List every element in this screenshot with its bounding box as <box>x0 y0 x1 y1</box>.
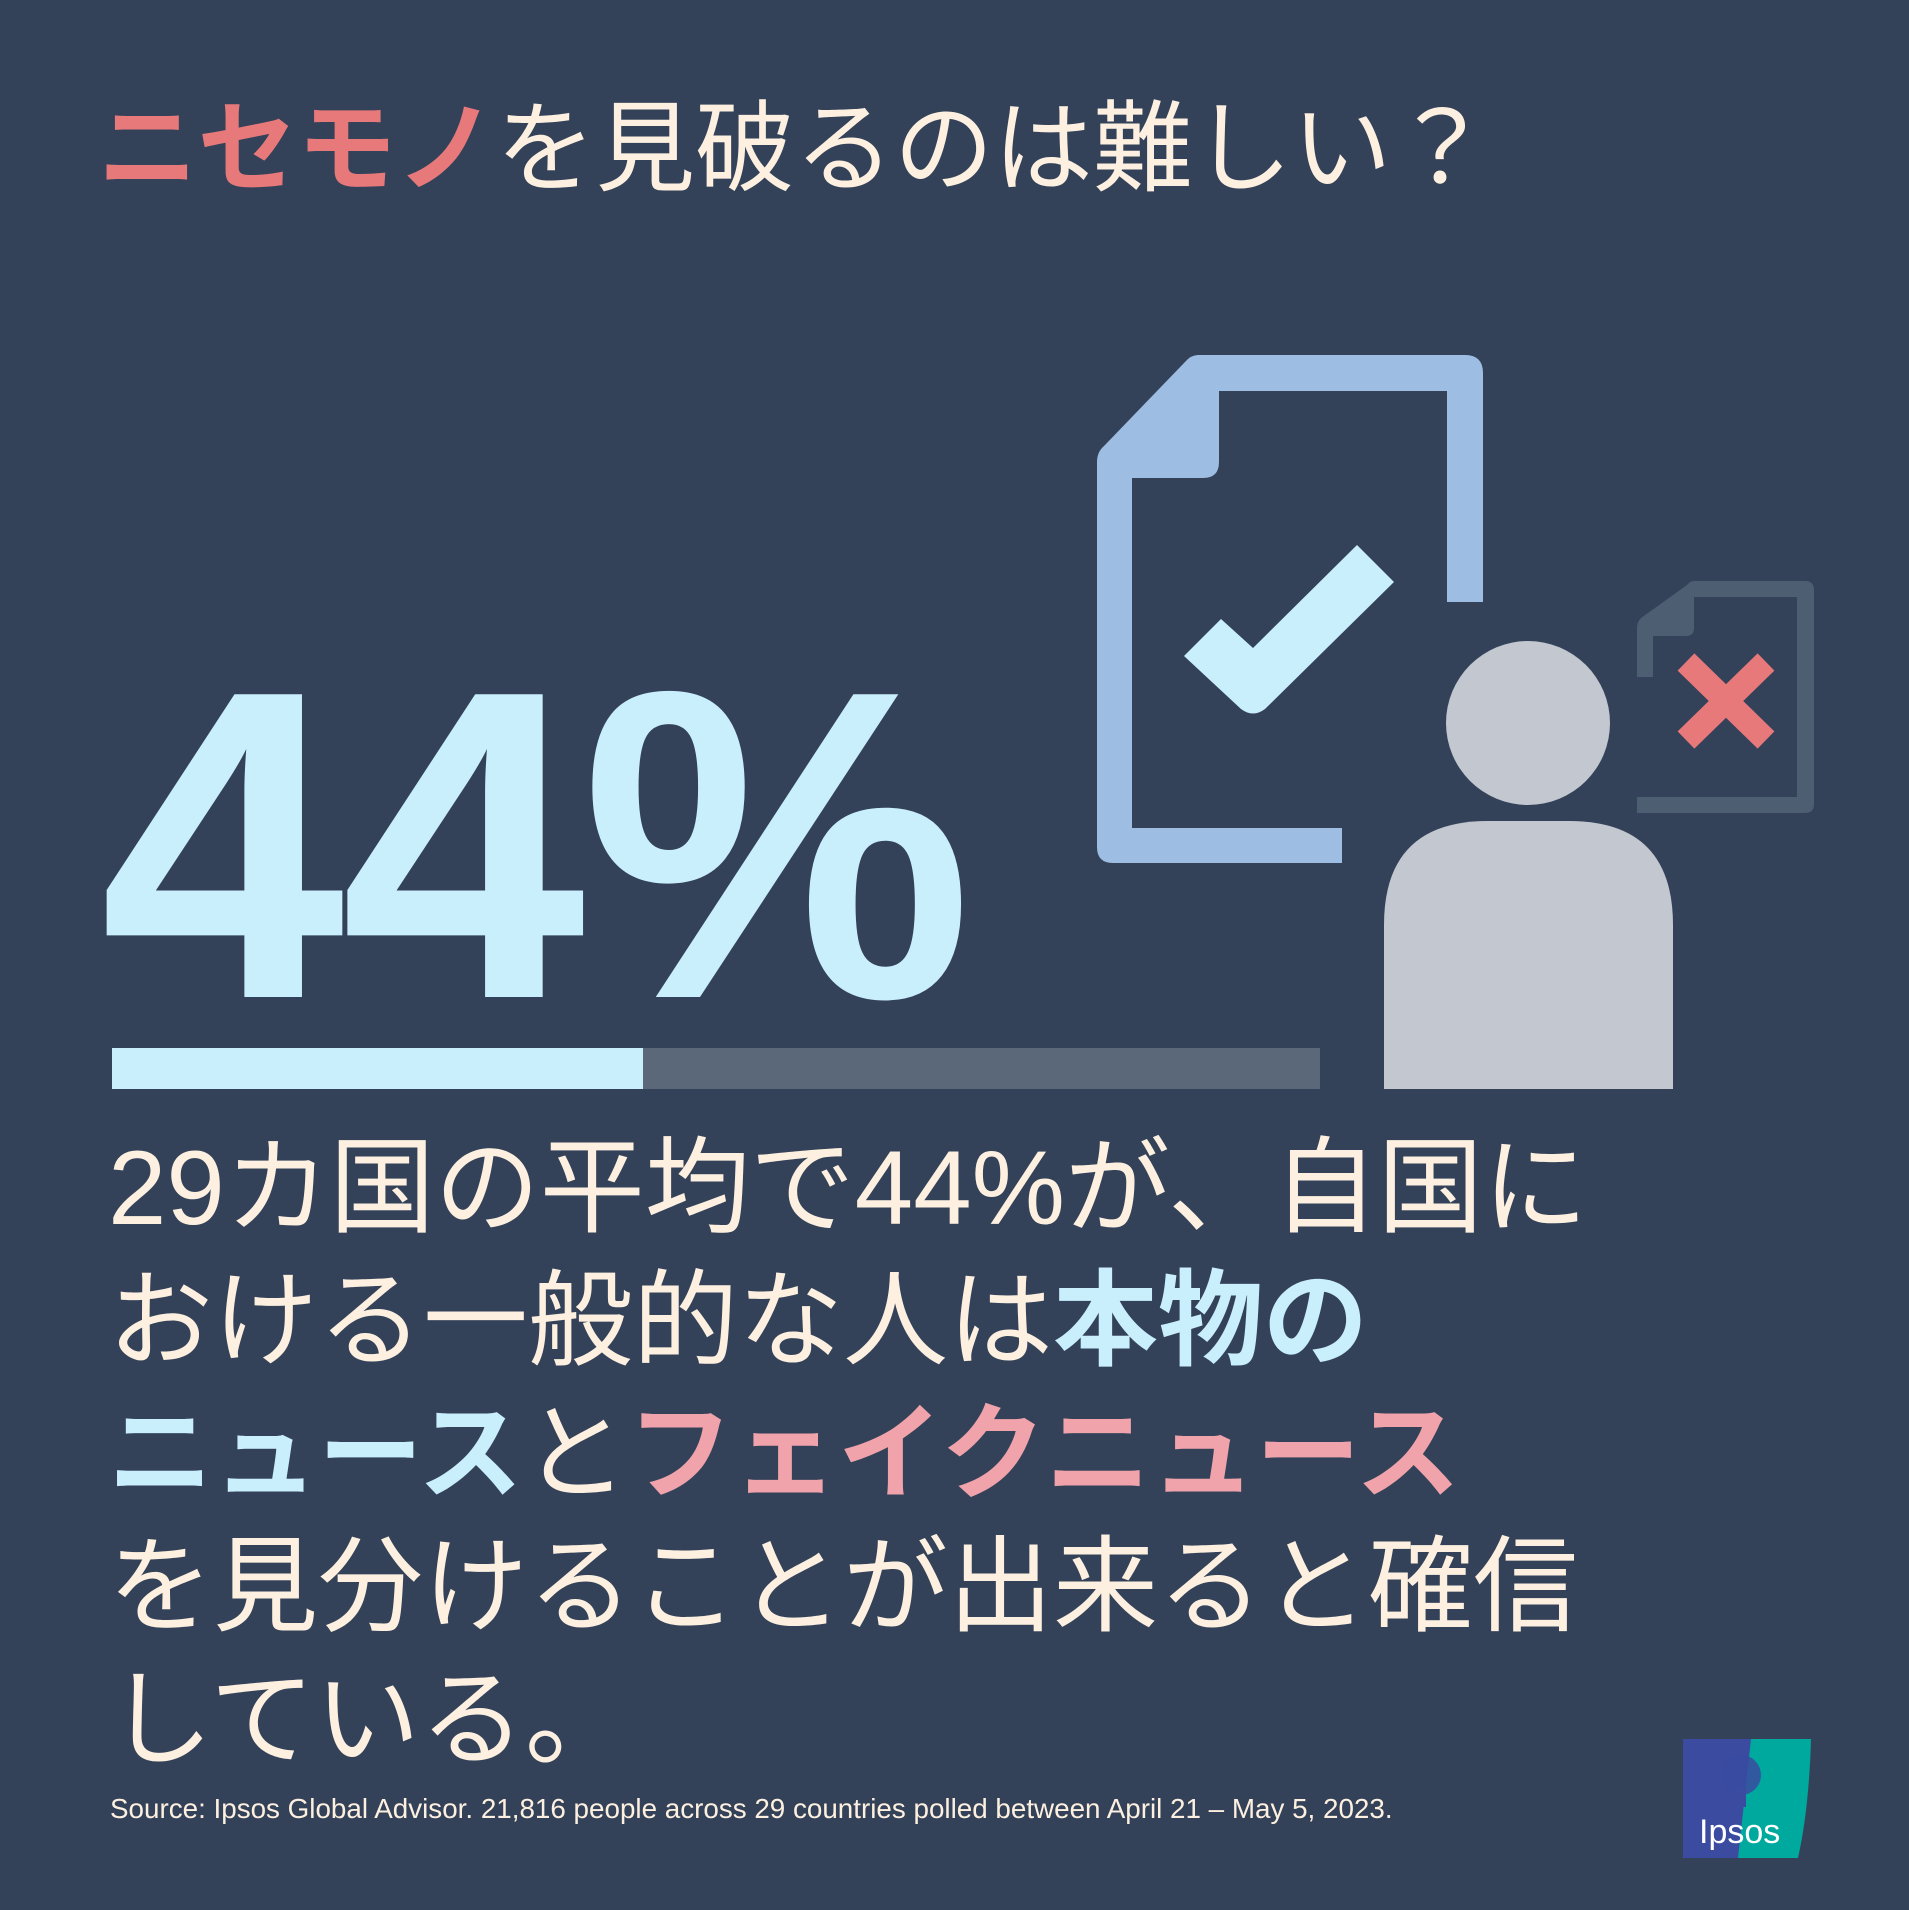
body text: ニュースとフェイクニュース <box>108 1396 1460 1513</box>
logo: Ipsos: Ipsos <box>1699 1813 1780 1851</box>
icon: red x <box>1686 662 1766 740</box>
source note: Source: Ipsos Global Advisor. 21,816 people across 29 countries polled between April 21 – May 5, 2023. <box>110 1793 1393 1824</box>
icon: small rejected document <box>1637 581 1814 813</box>
icon: big document <box>1097 355 1483 863</box>
icon: person <box>1384 641 1673 1089</box>
body text <box>108 1130 1588 1779</box>
progress bar <box>112 1048 1320 1089</box>
title: ニセモノを見破るのは難しい？ <box>98 94 1491 205</box>
logo: Ipsos <box>1683 1739 1811 1858</box>
body text: を見分けることが出来ると確信 <box>108 1529 1578 1646</box>
body text: おける一般的な人は本物の <box>108 1263 1368 1380</box>
body text: している。 <box>108 1662 630 1779</box>
icon: check mark <box>1184 545 1394 714</box>
body text: 29カ国の平均で44%が、自国に <box>108 1130 1588 1247</box>
big number 44%: 44% <box>100 600 969 1091</box>
